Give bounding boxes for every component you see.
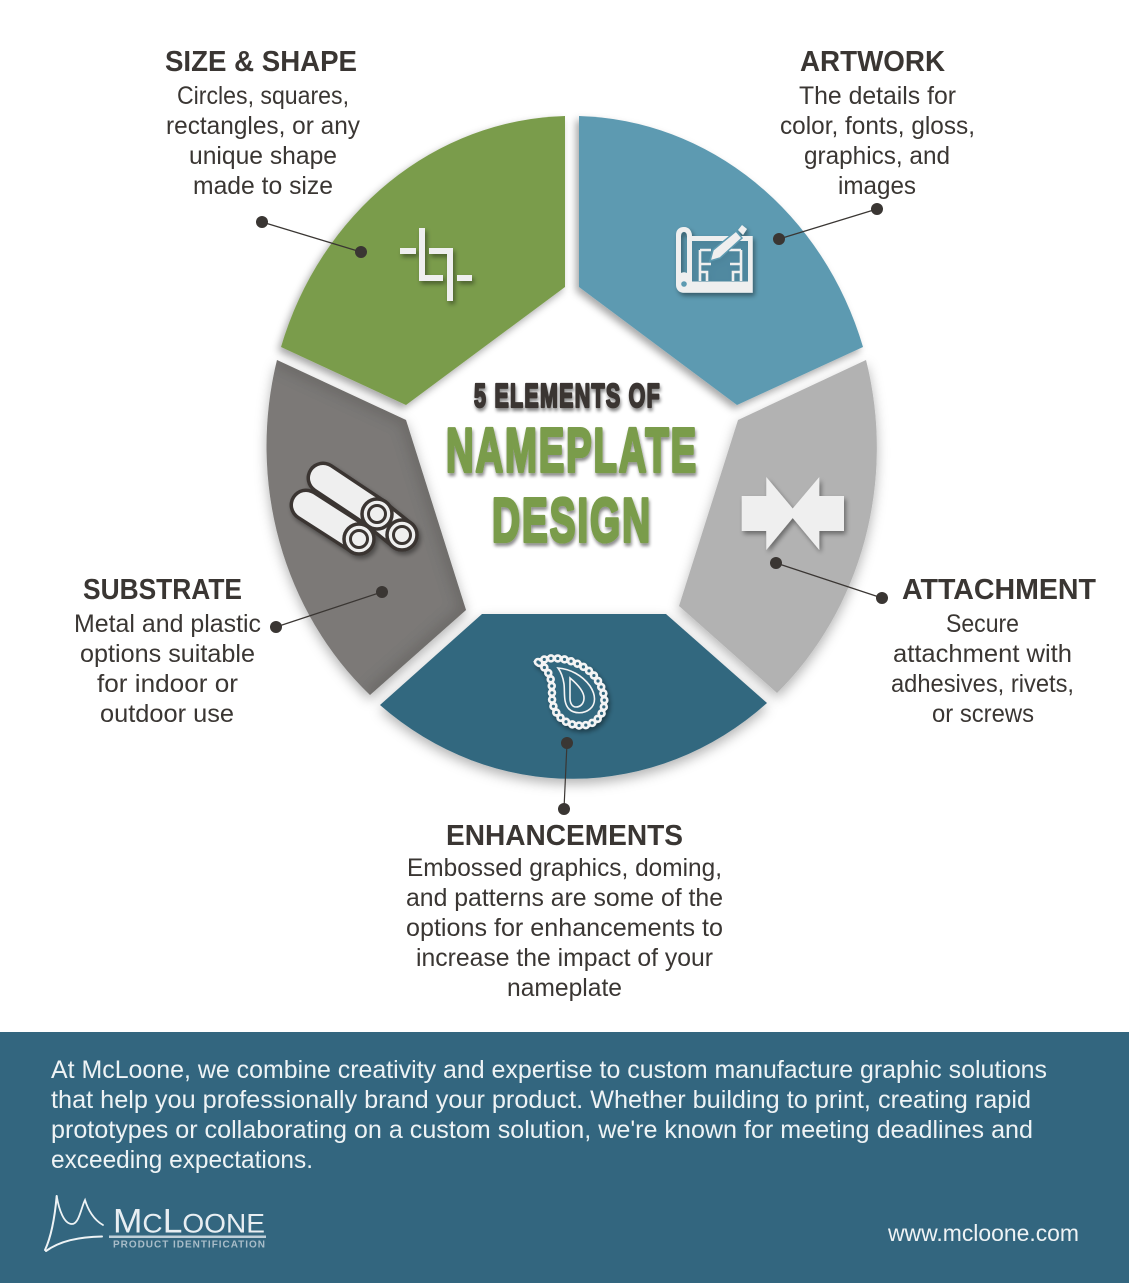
- description: artwork: images: [838, 172, 916, 200]
- heading: enhancements: ENHANCEMENTS: [446, 820, 683, 852]
- description: size and shape: made to size: [193, 172, 333, 200]
- website url: www.mcloone.com: [887, 1220, 1079, 1246]
- leader: size and shape: [256, 216, 367, 258]
- leader: artwork: [773, 203, 883, 245]
- description: substrate: options suitable: [80, 640, 255, 668]
- segment: substrate: [267, 360, 466, 695]
- text block: enhancements: [406, 820, 723, 1002]
- segment: size and shape: [281, 116, 565, 405]
- icon: paisley: [538, 658, 604, 726]
- logo mark: [45, 1196, 103, 1251]
- title line: design: DESIGN: [492, 486, 652, 556]
- text block: artwork: [780, 46, 975, 200]
- logo rule: [109, 1236, 266, 1238]
- description: size and shape: rectangles, or any: [166, 112, 360, 140]
- leader: enhancements: [558, 737, 573, 815]
- description: enhancements: Embossed graphics, doming,: [407, 854, 722, 882]
- description: artwork: graphics, and: [804, 142, 950, 170]
- footer paragraph: that help you professionally brand your product. Whether building to print, creating rapid: [51, 1086, 1031, 1114]
- description: attachment: Secure: [946, 610, 1019, 638]
- description: size and shape: unique shape: [189, 142, 337, 170]
- footer background: [0, 1032, 1129, 1283]
- description: enhancements: increase the impact of your: [416, 944, 713, 972]
- description: artwork: color, fonts, gloss,: [780, 112, 975, 140]
- leader: attachment: [770, 557, 888, 604]
- heading: size and shape: SIZE & SHAPE: [165, 46, 357, 78]
- logo: McLoone: [45, 1196, 266, 1251]
- description: enhancements: and patterns are some of the: [406, 884, 723, 912]
- wheel diagram: [267, 116, 877, 779]
- icon: arrows: [742, 477, 844, 550]
- text block: attachment: [891, 574, 1096, 728]
- footer paragraph: At McLoone, we combine creativity and expertise to custom manufacture graphic solutions: [51, 1056, 1047, 1084]
- footer paragraph: exceeding expectations.: [51, 1146, 313, 1174]
- heading: substrate: SUBSTRATE: [83, 574, 242, 606]
- segment: artwork: [579, 116, 863, 405]
- description: attachment: [891, 610, 1074, 728]
- icon: crop: [400, 228, 472, 301]
- logo tagline: PRODUCT IDENTIFICATION: [113, 1240, 265, 1250]
- description: attachment: or screws: [932, 700, 1034, 728]
- description: substrate: [74, 610, 261, 728]
- description: artwork: The details for: [799, 82, 956, 110]
- text block: substrate: [74, 574, 261, 728]
- heading: attachment: ATTACHMENT: [902, 574, 1096, 606]
- icon: tubes: [306, 478, 417, 554]
- footer paragraph: prototypes or collaborating on a custom solution, we're known for meeting deadlines and: [51, 1116, 1033, 1144]
- description: substrate: for indoor or: [97, 670, 238, 698]
- leader: substrate: [270, 586, 388, 633]
- description: enhancements: options for enhancements to: [406, 914, 723, 942]
- description: attachment: adhesives, rivets,: [891, 670, 1074, 698]
- segment: enhancements: [380, 614, 767, 779]
- description: size and shape: Circles, squares,: [177, 82, 349, 110]
- title line: 5 elements of: 5 ELEMENTS OF: [474, 377, 661, 414]
- description: enhancements: nameplate: [507, 974, 622, 1002]
- footer panel: [0, 1032, 1129, 1283]
- center title: [446, 377, 698, 556]
- icon: blueprint: [676, 225, 753, 293]
- description: substrate: Metal and plastic: [74, 610, 261, 638]
- description: size and shape: [166, 82, 360, 200]
- logo wordmark: MCLOONE: [113, 1202, 265, 1240]
- description: artwork: [780, 82, 975, 200]
- segment: attachment: [679, 360, 877, 693]
- description: attachment: attachment with: [893, 640, 1072, 668]
- text block: size and shape: [165, 46, 360, 200]
- footer paragraph: [51, 1056, 1047, 1174]
- heading: artwork: ARTWORK: [800, 46, 945, 78]
- description: substrate: outdoor use: [100, 700, 234, 728]
- description: enhancements: [406, 854, 723, 1002]
- title line: nameplate: NAMEPLATE: [446, 416, 698, 486]
